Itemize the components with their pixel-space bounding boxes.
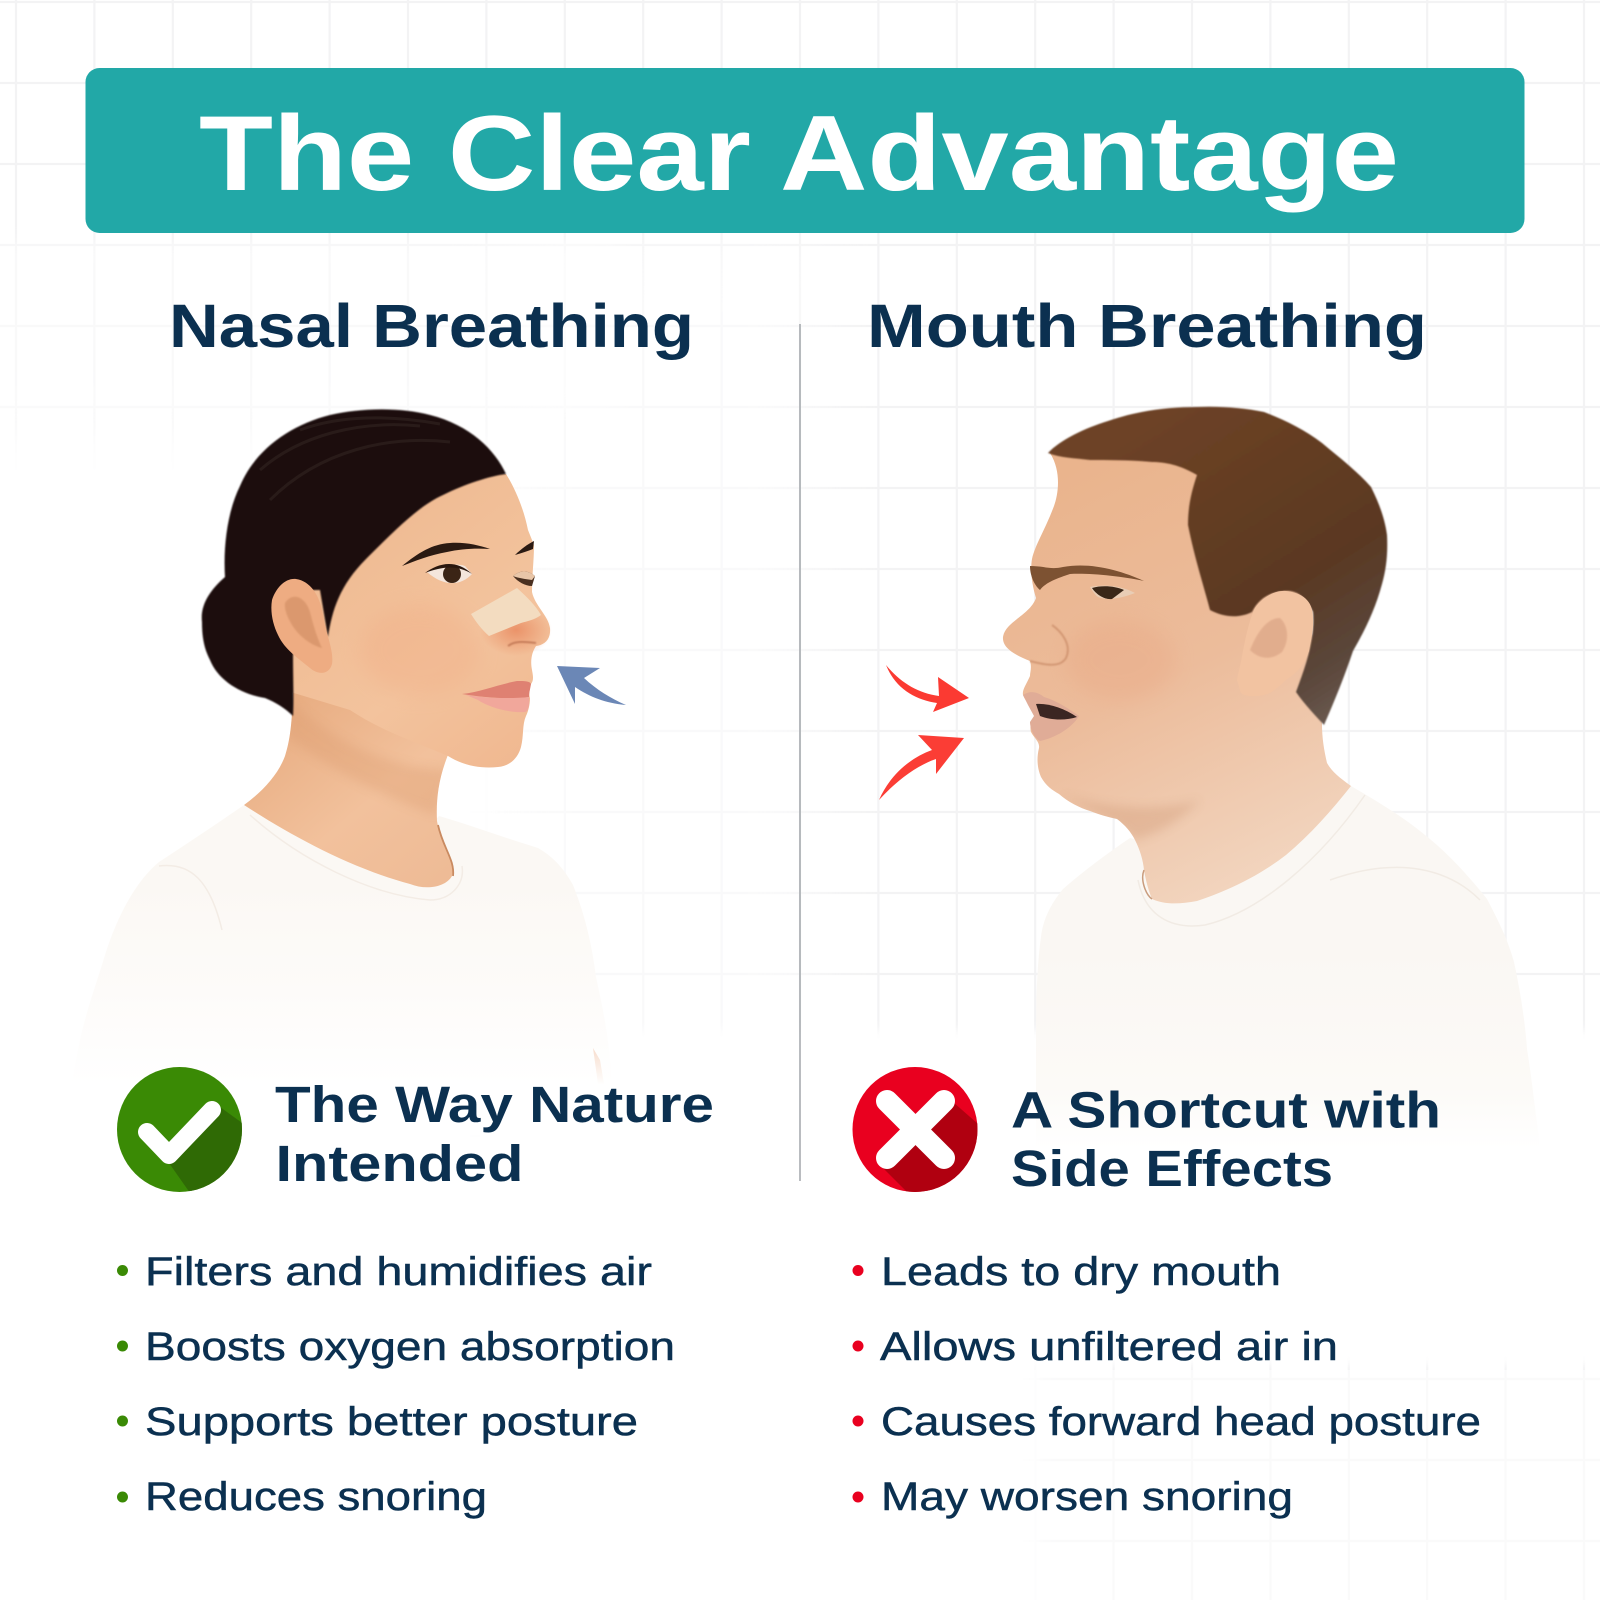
benefit 1: Filters and humidifies air (145, 1250, 652, 1294)
benefit 4: Reduces snoring (145, 1475, 487, 1519)
subheading: the way nature intended: Intended (276, 1135, 524, 1192)
man shirt (1036, 786, 1540, 1146)
nasal summary (117, 1067, 728, 1200)
woman face (284, 474, 550, 768)
arrow: lower mouth airflow (879, 735, 964, 800)
drawback 3: Causes forward head posture (881, 1400, 1481, 1444)
drawback 1: Leads to dry mouth (881, 1250, 1281, 1294)
man mouth (1023, 692, 1079, 741)
mouth summary (852, 1067, 1455, 1200)
drawback 2: Allows unfiltered air in (880, 1325, 1338, 1369)
benefit 3: Supports better posture (145, 1400, 638, 1444)
list: nasal benefits (117, 1250, 675, 1519)
woman ear (271, 579, 332, 673)
woman lips (462, 681, 531, 712)
heading: mouth breathing: Mouth Breathing (867, 292, 1427, 360)
man hair (1048, 407, 1387, 725)
nasal strip (471, 588, 541, 636)
man skin shading (1030, 620, 1200, 899)
arrow: nasal airflow in (557, 666, 626, 705)
man neck and face (1003, 445, 1351, 903)
centre divider (799, 324, 801, 1181)
list: mouth breathing drawbacks (852, 1250, 1481, 1519)
man brow and eye (1030, 565, 1144, 599)
icon: red cross (852, 1067, 978, 1192)
man ear (1237, 591, 1313, 696)
title banner (86, 68, 1524, 233)
icon: green check (117, 1067, 242, 1192)
woman eyes and brows (402, 541, 535, 586)
drawback 4: May worsen snoring (881, 1475, 1293, 1519)
subheading: the way nature intended: The Way Nature (275, 1076, 714, 1133)
title text: The Clear Advantage (199, 93, 1399, 213)
subheading: a shortcut with side effects: Side Effects (1011, 1140, 1333, 1197)
illustration: man mouth breathing (1003, 407, 1540, 1146)
cheek shading (360, 605, 480, 695)
woman neck (244, 690, 453, 887)
arrow: upper mouth airflow (886, 665, 969, 712)
subheading: a shortcut with side effects: A Shortcut with (1011, 1082, 1441, 1138)
benefit 2: Boosts oxygen absorption (145, 1325, 675, 1369)
woman nose tip (480, 604, 552, 656)
woman shirt (70, 805, 612, 1090)
illustration: woman with nasal strip (109, 408, 603, 1079)
heading: nasal breathing: Nasal Breathing (169, 292, 694, 360)
woman hair and bun (202, 409, 506, 716)
